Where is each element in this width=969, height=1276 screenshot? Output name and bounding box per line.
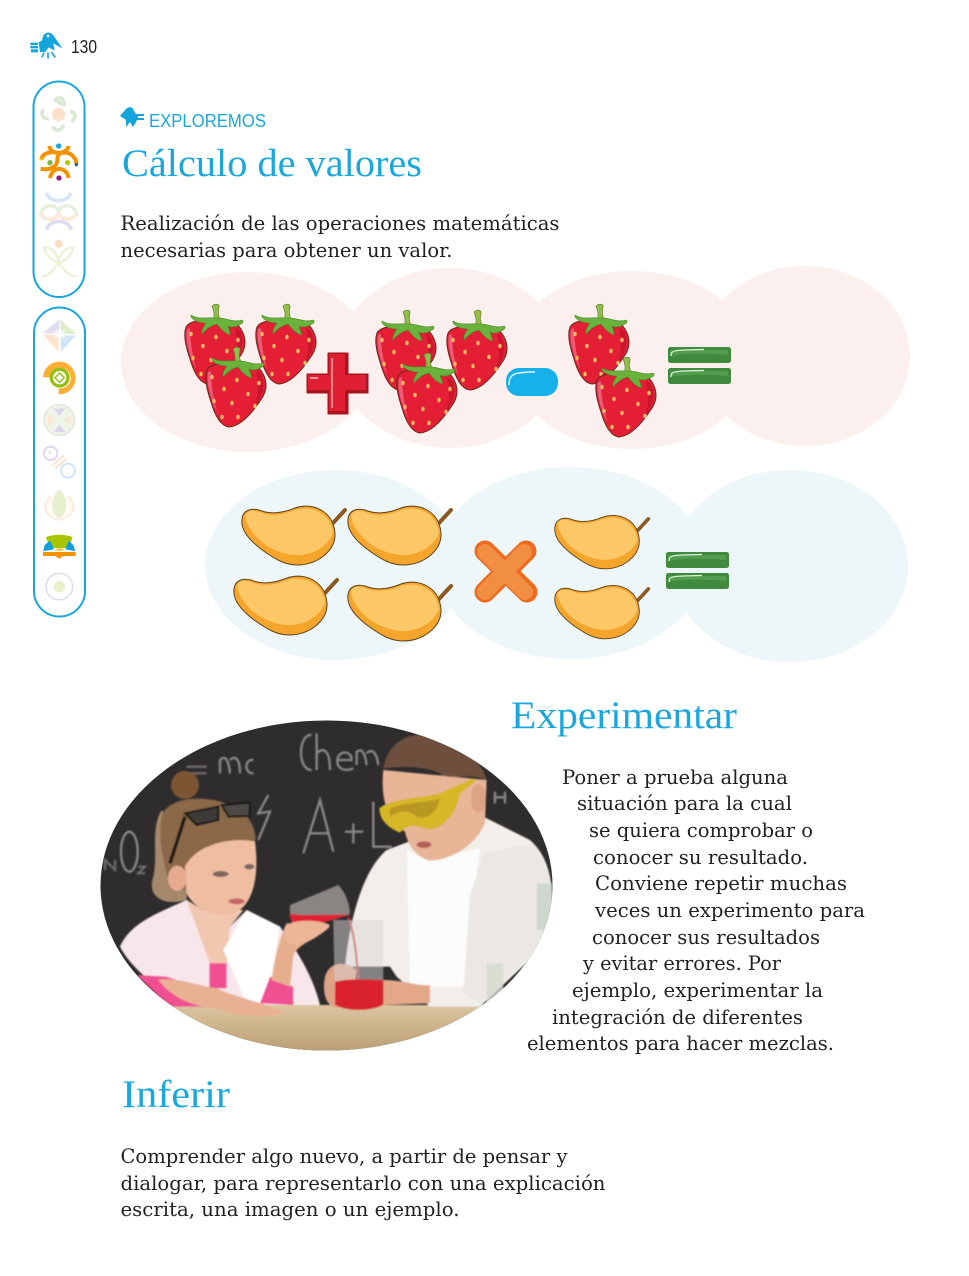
page number: 130	[71, 37, 97, 57]
poured beaker	[289, 884, 351, 917]
text block: definition of experimentar: elementos para hacer mezclas.	[527, 1031, 834, 1055]
icon: faded spiral	[42, 98, 75, 130]
icon: faded circles link	[44, 447, 75, 478]
girl face	[185, 840, 256, 915]
icon: faded sprout	[41, 240, 77, 277]
girl hair back	[152, 810, 190, 902]
text block: definition of experimentar: situación para la cual	[577, 791, 792, 815]
heading: Cálculo de valores: Cálculo de valores	[122, 142, 422, 185]
text block: definition of experimentar: ejemplo, experimentar la	[572, 978, 823, 1002]
strawberries group one	[185, 304, 316, 427]
girl hair	[171, 771, 199, 799]
text block: definition of inferir: dialogar, para representarlo con una explicación	[120, 1171, 606, 1195]
text block: definition of inferir	[120, 1144, 606, 1221]
beaker with red liquid	[333, 920, 383, 1007]
panel: pink blob with strawberries	[121, 266, 910, 452]
mangoes group two	[555, 515, 648, 639]
text block: definition of cálculo	[120, 211, 560, 262]
yellow goggles	[379, 778, 475, 833]
icon: active green fan	[43, 535, 76, 559]
icon: faded circle burst	[46, 573, 73, 600]
panel: blue blob with mangoes	[205, 467, 908, 662]
text block: definition of experimentar: veces un experimento para	[594, 898, 865, 922]
icon: active orange ring	[43, 362, 76, 394]
section label: EXPLOREMOS	[149, 111, 266, 131]
icon: equals sign	[666, 552, 729, 589]
strawberries group two	[376, 310, 507, 433]
icon: small bird	[120, 107, 144, 127]
text block: definition of inferir: escrita, una imagen o un ejemplo.	[120, 1197, 460, 1221]
mangoes group one	[234, 506, 451, 641]
text block: definition of experimentar: conocer sus resultados	[592, 925, 820, 949]
icon: page bird logo	[30, 33, 63, 59]
bottle at right	[537, 883, 552, 930]
section label	[120, 107, 266, 131]
text block: definition of experimentar: Poner a prueba alguna	[562, 765, 788, 789]
heading: Experimentar: Experimentar	[511, 694, 737, 737]
sunglasses	[170, 817, 185, 863]
icon: plus sign	[307, 353, 368, 414]
text block: definition of experimentar	[527, 765, 865, 1055]
text block: definition of cálculo: necesarias para obtener un valor.	[120, 238, 452, 262]
table	[157, 1005, 507, 1060]
boy coat	[345, 817, 552, 1007]
text block: definition of experimentar: conocer su resultado.	[593, 845, 808, 869]
panel: bottom icon pill	[34, 308, 85, 616]
text block: definition of experimentar: Conviene repetir muchas	[595, 871, 847, 895]
panel: top icon pill	[34, 82, 84, 297]
text block: definition of cálculo: Realización de las operaciones matemáticas	[120, 211, 560, 235]
icon: faded lotus	[45, 489, 74, 520]
text block: definition of experimentar: se quiera comprobar o	[589, 818, 813, 842]
icon: faded cross circle	[44, 405, 75, 435]
icon: faded rings	[41, 193, 77, 230]
girl hand	[284, 921, 330, 945]
text block: definition of experimentar: y evitar errores. Por	[582, 951, 781, 975]
icon: multiplication sign	[485, 551, 527, 592]
icon: active orange knot	[40, 143, 78, 181]
text block: definition of experimentar: integración de diferentes	[552, 1005, 803, 1029]
photo: children doing a chemistry experiment	[100, 720, 554, 1060]
text block: definition of inferir: Comprender algo nuevo, a partir de pensar y	[120, 1144, 568, 1168]
icon: faded diamond	[43, 319, 76, 352]
icon: equals sign	[668, 347, 731, 384]
chalk writing	[105, 733, 505, 873]
icon: minus sign	[506, 368, 558, 396]
heading: Inferir: Inferir	[122, 1073, 230, 1116]
boy arm	[383, 980, 430, 1005]
boy head	[383, 770, 487, 861]
girl coat	[120, 900, 320, 1005]
strawberries group three	[569, 304, 656, 437]
